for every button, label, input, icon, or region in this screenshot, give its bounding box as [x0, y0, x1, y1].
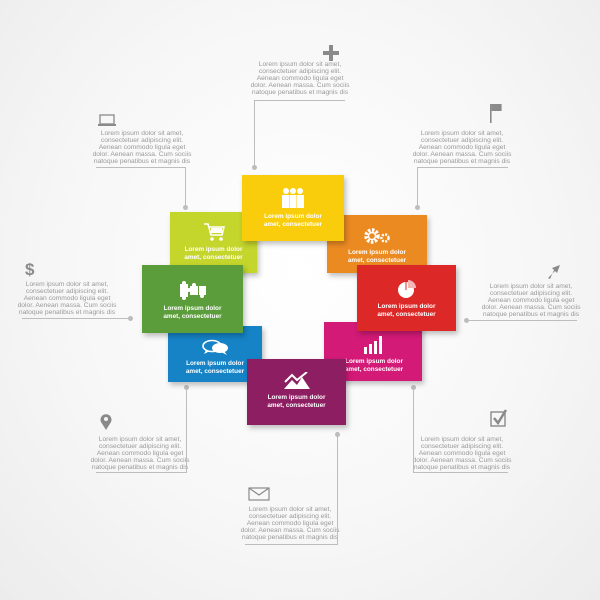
text block: right: Aenean commodo ligula eget	[488, 297, 574, 304]
text block: top-left: dolor. Aenean massa. Cum sociis	[93, 151, 191, 158]
text block: left: Lorem ipsum dolor sit amet,	[26, 281, 108, 288]
card: magenta (bar chart): Lorem ipsum dolor	[345, 358, 403, 365]
text block: bottom-left: Aenean commodo ligula eget	[97, 450, 183, 457]
text block: top: natoque penatibus et magnis dis	[252, 89, 348, 96]
text block: bottom: dolor. Aenean massa. Cum sociis	[241, 527, 339, 534]
icon: plus	[323, 45, 339, 61]
text block: top: dolor. Aenean massa. Cum sociis	[251, 82, 349, 89]
card: yellow (people)	[242, 175, 344, 241]
text block: top-right: natoque penatibus et magnis dis	[414, 158, 510, 165]
callout: bottom-left	[90, 385, 190, 473]
text block: top: Aenean commodo ligula eget	[257, 75, 343, 82]
text block: top: Lorem ipsum dolor sit amet,	[259, 61, 341, 68]
text block: top-left: Lorem ipsum dolor sit amet,	[101, 130, 183, 137]
icon: flag	[490, 104, 502, 123]
icon: checkbox	[490, 410, 507, 427]
callout: bottom	[240, 432, 340, 545]
text block: top-left: natoque penatibus et magnis dis	[94, 158, 190, 165]
text block: top	[250, 61, 350, 96]
callout: top	[250, 45, 350, 170]
text block: bottom-right: dolor. Aenean massa. Cum sociis	[413, 457, 511, 464]
text block: right: natoque penatibus et magnis dis	[483, 311, 579, 318]
text block: top: consectetuer adipiscing elit.	[259, 68, 341, 75]
text block: right: Lorem ipsum dolor sit amet,	[490, 283, 572, 290]
card: orange (gears): amet, consectetuer	[348, 256, 406, 264]
text block: top-right: consectetuer adipiscing elit.	[421, 137, 503, 144]
text block: left: consectetuer adipiscing elit.	[26, 288, 108, 295]
text block: bottom-right: Aenean commodo ligula eget	[419, 450, 505, 457]
card: red (pie chart): Lorem ipsum dolor	[378, 303, 435, 310]
card: magenta (bar chart): amet, consectetuer	[345, 366, 403, 372]
text block: top-left: consectetuer adipiscing elit.	[101, 137, 183, 144]
text block: bottom-right: natoque penatibus et magnis dis	[414, 464, 510, 471]
card: lime (cart): Lorem ipsum dolor	[185, 246, 242, 253]
card: purple (mountain chart): amet, consectetuer	[267, 402, 326, 408]
card: blue (speech bubbles): Lorem ipsum dolor	[186, 360, 244, 367]
card: purple (mountain chart): Lorem ipsum dolor	[268, 394, 325, 401]
text block: right: consectetuer adipiscing elit.	[490, 290, 572, 297]
card: red (pie chart): amet, consectetuer	[377, 310, 436, 318]
card: purple (mountain chart)	[247, 359, 346, 425]
card: orange (gears): Lorem ipsum dolor	[348, 249, 406, 256]
icon: pin	[100, 414, 112, 430]
text block: right	[482, 283, 580, 318]
text block: bottom: Lorem ipsum dolor sit amet,	[249, 506, 331, 513]
text block: left: Aenean commodo ligula eget	[24, 295, 110, 302]
card: lime (cart)	[170, 212, 257, 273]
text block: left: natoque penatibus et magnis dis	[19, 309, 115, 316]
text block: top-right: Lorem ipsum dolor sit amet,	[421, 130, 503, 137]
callout: top-left	[92, 114, 192, 210]
text block: bottom-left	[90, 436, 190, 471]
text block: bottom-left: dolor. Aenean massa. Cum sociis	[91, 457, 189, 464]
text block: bottom-right: Lorem ipsum dolor sit amet,	[421, 436, 503, 443]
card: blue (speech bubbles)	[168, 326, 262, 382]
text block: bottom-right	[412, 436, 512, 471]
card: magenta (bar chart)	[324, 322, 422, 381]
icon: dollar: $	[25, 260, 34, 279]
text block: top-left: Aenean commodo ligula eget	[99, 144, 185, 151]
text block: bottom-left: natoque penatibus et magnis dis	[92, 464, 188, 471]
card: lime (cart): amet, consectetuer	[184, 254, 243, 260]
text block: bottom-left: consectetuer adipiscing elit.	[99, 443, 181, 450]
text block: bottom: consectetuer adipiscing elit.	[249, 513, 331, 520]
card: yellow (people): Lorem ipsum dolor	[264, 213, 322, 220]
text block: bottom: natoque penatibus et magnis dis	[242, 534, 338, 541]
card: yellow (people): amet, consectetuer	[264, 220, 322, 228]
text block: left	[18, 281, 116, 316]
callout: right	[464, 265, 580, 323]
text block: top-left	[92, 130, 192, 165]
callout: bottom-right	[411, 385, 512, 473]
card: orange (gears)	[327, 215, 427, 273]
icon: laptop	[98, 114, 116, 126]
text block: top-right	[412, 130, 512, 165]
text block: right: dolor. Aenean massa. Cum sociis	[482, 304, 580, 311]
card: blue (speech bubbles): amet, consectetuer	[186, 368, 244, 374]
text block: bottom-left: Lorem ipsum dolor sit amet,	[99, 436, 181, 443]
card: green (puzzle): amet, consectetuer	[163, 312, 222, 320]
text block: top-right: Aenean commodo ligula eget	[419, 144, 505, 151]
icon: arrow	[548, 265, 560, 279]
callout: top-right	[412, 104, 512, 210]
card: green (puzzle): Lorem ipsum dolor	[164, 305, 221, 312]
text block: bottom: Aenean commodo ligula eget	[247, 520, 333, 527]
callout: left	[18, 260, 133, 321]
icon: envelope	[248, 487, 270, 501]
text block: bottom	[240, 506, 340, 541]
text block: top-right: dolor. Aenean massa. Cum sociis	[413, 151, 511, 158]
text block: bottom-right: consectetuer adipiscing elit.	[421, 443, 503, 450]
card: green (puzzle)	[142, 265, 243, 333]
text block: left: dolor. Aenean massa. Cum sociis	[18, 302, 116, 309]
card: red (pie chart)	[357, 265, 456, 331]
